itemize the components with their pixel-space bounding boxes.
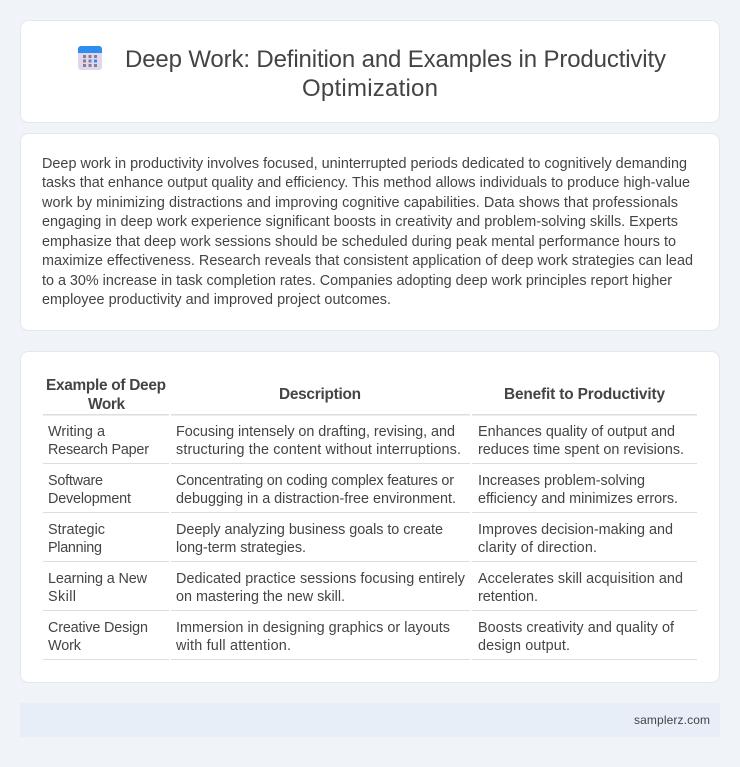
title: Optimization — [302, 75, 438, 102]
table row: writing a research paper: structuring the content without interruptions. — [176, 442, 461, 458]
table row: strategic planning — [43, 522, 697, 562]
table row: software development: debugging in a distraction-free environment. — [176, 491, 456, 507]
icon: calendar — [78, 46, 102, 70]
table row: learning a new skill: retention. — [478, 589, 538, 605]
table row: creative design work: Boosts creativity and quality of — [478, 620, 675, 636]
table row: learning a new skill — [43, 571, 697, 611]
title: Deep Work: Definition and Examples in Productivity — [125, 46, 666, 73]
table row: strategic planning: long-term strategies. — [176, 540, 306, 556]
table row: strategic planning: Improves decision-making and — [478, 522, 673, 538]
title — [125, 46, 666, 102]
table row: writing a research paper: Focusing intensely on drafting, revising, and — [176, 424, 455, 440]
table row: strategic planning: clarity of direction. — [478, 540, 597, 556]
table row: software development: Concentrating on coding complex features or — [176, 473, 454, 489]
table row: writing a research paper: Research Paper — [48, 442, 149, 458]
table header: Work — [88, 396, 125, 413]
table row: writing a research paper: reduces time spent on revisions. — [478, 442, 684, 458]
text block: intro — [41, 156, 693, 308]
text block: intro: tasks that enhance output quality and efficiency. This method allows individuals to produce high-value — [42, 175, 690, 191]
text block: intro: work by minimizing distractions and improving cognitive capabilities. Data shows that professionals — [41, 195, 678, 211]
table row: writing a research paper: Enhances quality of output and — [478, 424, 675, 440]
footer — [20, 703, 720, 737]
table row: learning a new skill: Skill — [48, 589, 76, 605]
text block: intro: emphasize that deep work sessions should be scheduled during peak mental performance hours to — [42, 234, 676, 250]
table header: Example of Deep — [46, 377, 166, 394]
table row: strategic planning: Strategic — [48, 522, 105, 538]
table row: learning a new skill: Learning a New — [48, 571, 148, 587]
table row: software development: efficiency and minimizes errors. — [478, 491, 678, 507]
footer text: site name: samplerz.com — [634, 713, 710, 727]
panel: examples table — [20, 352, 720, 682]
table row: writing a research paper: Writing a — [48, 424, 105, 440]
table row: software development: Increases problem-solving — [478, 473, 645, 489]
table row: learning a new skill: Accelerates skill acquisition and — [478, 571, 683, 587]
text block: intro: engaging in deep work experience significant boosts in creativity and problem-solving skills. Experts — [42, 214, 678, 230]
table row: creative design work: design output. — [478, 638, 570, 654]
table row: creative design work: Creative Design — [48, 620, 148, 636]
table header: Benefit to Productivity — [504, 386, 665, 403]
table header: Description — [279, 386, 361, 403]
text block: intro: employee productivity and improved project outcomes. — [42, 292, 391, 308]
table row: learning a new skill: on mastering the new skill. — [176, 589, 345, 605]
table header — [43, 377, 697, 416]
table row: strategic planning: Deeply analyzing business goals to create — [176, 522, 443, 538]
panel: title card — [20, 20, 720, 122]
table row: learning a new skill: Dedicated practice sessions focusing entirely — [176, 571, 466, 587]
table row: writing a research paper — [43, 424, 697, 464]
table row: creative design work: Work — [48, 638, 82, 654]
text block: intro: Deep work in productivity involves focused, uninterrupted periods dedicated to cognitively demanding — [42, 156, 687, 172]
table row: creative design work: with full attention. — [175, 638, 291, 654]
table row: creative design work: Immersion in designing graphics or layouts — [176, 620, 450, 636]
table row: software development — [43, 473, 697, 513]
text block: intro: to a 30% increase in task completion rates. Companies adopting deep work principles report higher — [42, 273, 672, 289]
table row: software development: Software — [48, 473, 103, 489]
text block: intro: maximize effectiveness. Research reveals that consistent application of deep work strategies can lead — [42, 253, 693, 269]
table row: strategic planning: Planning — [48, 540, 102, 556]
table row: creative design work — [43, 620, 697, 660]
panel: intro paragraph — [20, 134, 720, 330]
table row: software development: Development — [48, 491, 131, 507]
